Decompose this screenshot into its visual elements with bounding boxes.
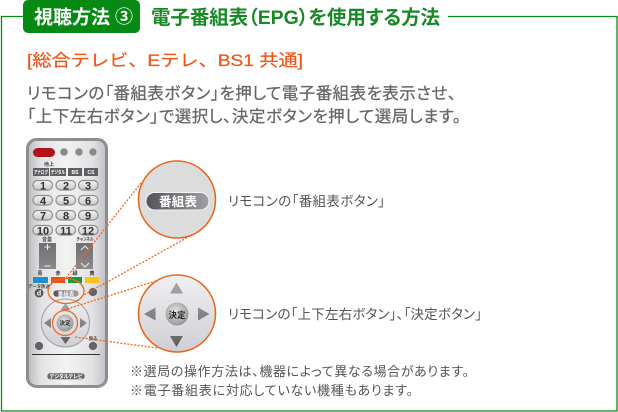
d button: d <box>37 290 41 298</box>
d button: データ放送 <box>28 283 50 290</box>
number buttons <box>33 180 98 238</box>
volume and channel bars: 音量 <box>42 236 52 243</box>
color buttons <box>33 270 99 283</box>
input buttons: 地上 <box>44 161 54 168</box>
input buttons: BS <box>72 170 79 176</box>
number buttons: 8 <box>63 210 69 222</box>
side buttons <box>34 288 98 350</box>
number buttons: 7 <box>40 210 46 222</box>
callout: program guide button: 番組表 <box>159 194 197 209</box>
heading tag <box>23 0 140 33</box>
notes: ※選局の操作方法は、機器によって異なる場合があります。 <box>130 364 469 379</box>
dotted leader lines <box>64 183 190 348</box>
color buttons: 赤 <box>55 270 61 277</box>
d button <box>28 283 50 298</box>
number buttons: 6 <box>85 196 91 208</box>
color buttons: 緑 <box>72 270 78 277</box>
program guide button: 番組表 <box>58 290 75 298</box>
number buttons: 9 <box>85 210 91 222</box>
number buttons: 5 <box>63 196 69 208</box>
label: directional pad: リモコンの「上下左右ボタン」、「決定ボタン」 <box>228 307 482 322</box>
color buttons: 黄 <box>89 270 95 277</box>
bottom label pill: 戻る <box>89 336 97 342</box>
notes: ※電子番組表に対応していない機種もあります。 <box>130 383 413 398</box>
directional pad <box>42 299 90 347</box>
highlight rings on remote <box>48 278 84 336</box>
title: 電子番組表（EPG）を使用する方法 <box>151 6 440 29</box>
number buttons: 1 <box>40 180 46 192</box>
program guide button <box>53 290 79 298</box>
input buttons: アナログ <box>34 169 48 176</box>
bottom label pill <box>32 336 100 380</box>
heading tag: ③ <box>115 7 133 27</box>
instructions text: リモコンの「番組表ボタン」を押して電子番組表を表示させ、 <box>27 84 456 103</box>
input buttons: デジタル <box>51 169 65 176</box>
notes <box>130 364 469 398</box>
directional pad: 決定 <box>59 319 71 327</box>
callout: directional pad: 決定 <box>168 310 186 320</box>
number buttons: 4 <box>40 196 47 208</box>
input buttons: CS <box>88 170 95 176</box>
input buttons <box>33 161 98 176</box>
volume and channel bars: チャンネル <box>76 236 94 243</box>
number buttons: 2 <box>63 180 69 192</box>
heading tag: 視聴方法 <box>34 6 110 28</box>
volume and channel bars <box>39 236 94 269</box>
power button <box>33 148 55 157</box>
instructions text: 「上下左右ボタン」で選択し、決定ボタンを押して選局します。 <box>27 107 461 126</box>
instructions text <box>27 84 461 126</box>
top round buttons <box>60 148 97 156</box>
subheading: [総合テレビ、Eテレ、BS1 共通] <box>27 51 303 70</box>
callout: directional pad <box>138 275 216 352</box>
color buttons: 青 <box>37 270 43 277</box>
number buttons: 3 <box>85 180 91 192</box>
remote control <box>28 140 106 386</box>
number buttons: 12 <box>82 226 94 238</box>
label: program guide button: リモコンの「番組表ボタン」 <box>228 194 385 209</box>
callout: program guide button <box>138 161 216 238</box>
bottom label pill: デジタルテレビ <box>49 372 83 380</box>
number buttons: 10 <box>37 226 49 238</box>
number buttons: 11 <box>60 226 72 238</box>
